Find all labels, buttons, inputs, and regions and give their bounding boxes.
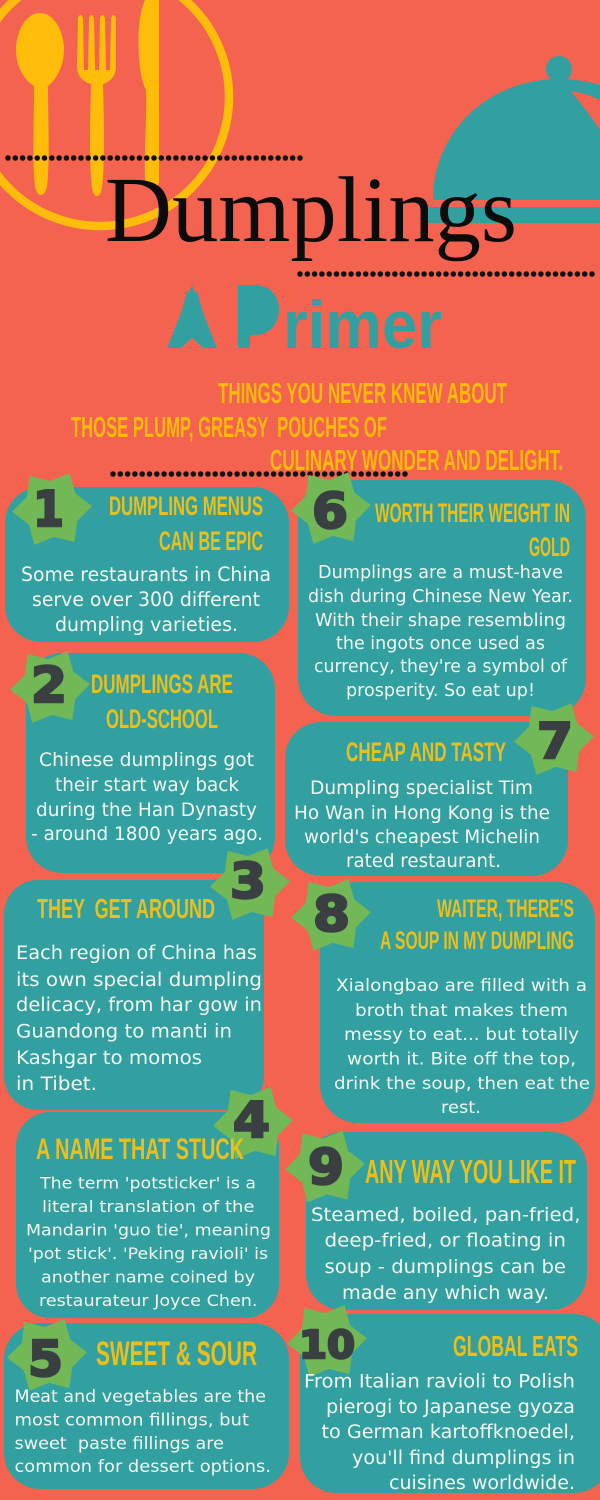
panel: fact 7 <box>285 702 596 876</box>
panel: fact 8 <box>289 878 595 1123</box>
subtitle: A Primer: rimer <box>283 287 442 363</box>
title: Dumplings <box>105 159 517 262</box>
body: fact 6: prosperity. So eat up! <box>346 681 535 701</box>
body: fact 9: soup - dumplings can be <box>324 1256 566 1278</box>
body: fact 1: dumpling varieties. <box>55 613 238 636</box>
body: fact 5: most common fillings, but <box>14 1411 250 1430</box>
intro text <box>71 378 563 477</box>
body: fact 8: drink the soup, then eat the <box>334 1074 590 1094</box>
heading: fact 2: DUMPLINGS ARE <box>91 669 233 699</box>
body: fact 4: Mandarin 'guo tie', meaning <box>26 1221 271 1240</box>
body: fact 1 <box>21 563 271 636</box>
icon: star badge 3 <box>208 847 292 921</box>
panel: fact 5 <box>4 1318 289 1489</box>
icon: star badge 1: 1 <box>33 481 64 538</box>
body: fact 6: dish during Chinese New Year. <box>308 587 573 607</box>
body: fact 6: Dumplings are a must-have <box>318 563 563 583</box>
body: fact 3: its own special dumpling <box>16 970 262 991</box>
body: fact 3: Each region of China has <box>16 943 257 964</box>
body: fact 8: worth it. Bite off the top, <box>347 1050 576 1070</box>
body: fact 8: Xialongbao are filled with a <box>336 976 587 996</box>
divider: top dotted line <box>8 155 302 161</box>
icon: star badge 10: 10 <box>299 1323 355 1367</box>
body: fact 4: The term 'potsticker' is a <box>39 1174 256 1193</box>
body: fact 2: during the Han Dynasty <box>36 799 257 821</box>
body: fact 5: sweet paste fillings are <box>14 1434 224 1453</box>
body: fact 5: Meat and vegetables are the <box>14 1387 266 1406</box>
icon: star badge 8: 8 <box>313 886 350 943</box>
body: fact 7: rated restaurant. <box>346 850 501 872</box>
body: fact 2: Chinese dumplings got <box>39 749 254 771</box>
icon: star badge 2: 2 <box>31 657 67 714</box>
icon: star badge 1 <box>10 472 94 546</box>
icon: star badge 9: 9 <box>308 1139 344 1196</box>
body: fact 7: world's cheapest Michelin <box>304 826 540 848</box>
body: fact 10 <box>304 1372 575 1494</box>
subtitle: A Primer <box>167 271 442 367</box>
body: fact 8: broth that makes them <box>355 1001 568 1021</box>
body: fact 10: From Italian ravioli to Polish <box>304 1372 575 1392</box>
body: fact 4: literal translation of the <box>42 1197 254 1216</box>
body: fact 9 <box>311 1204 580 1304</box>
icon: fork <box>77 15 116 196</box>
panel: fact 3 <box>4 847 292 1110</box>
body: fact 9: deep-fried, or floating in <box>324 1230 566 1252</box>
icon: star badge 8 <box>289 878 373 952</box>
body: fact 10: cuisines worldwide. <box>389 1473 575 1494</box>
heading: fact 5: SWEET & SOUR <box>96 1335 257 1373</box>
icon: star badge 6: 6 <box>312 483 348 540</box>
body: fact 9: made any which way. <box>342 1282 549 1304</box>
body: fact 10: to German kartoffknoedel, <box>322 1422 575 1443</box>
body: fact 4: 'pot stick'. 'Peking ravioli' is <box>28 1244 268 1263</box>
heading: fact 7: CHEAP AND TASTY <box>346 737 506 767</box>
body: fact 10: you'll find dumplings in <box>352 1448 575 1469</box>
body: fact 7 <box>294 777 550 872</box>
body: fact 2: - around 1800 years ago. <box>31 823 263 845</box>
body: fact 6: With their shape resembling <box>315 611 566 631</box>
icon: star badge 6 <box>289 471 373 545</box>
heading: fact 2: OLD-SCHOOL <box>106 704 218 734</box>
body: fact 6: the ingots once used as <box>336 634 545 654</box>
body: fact 7: Ho Wan in Hong Kong is the <box>294 802 550 824</box>
subtitle: A Primer: A <box>170 275 214 364</box>
icon: star badge 2 <box>8 650 92 724</box>
body: fact 5 <box>14 1387 271 1476</box>
icon: star badge 9 <box>283 1129 367 1204</box>
icon: spoon <box>16 13 64 195</box>
icon: star badge 10 <box>285 1304 369 1378</box>
heading: fact 2 <box>91 669 233 734</box>
body: fact 3: delicacy, from har gow in <box>16 995 262 1016</box>
icon: knife <box>138 0 159 189</box>
heading: fact 1 <box>109 491 263 556</box>
body: fact 9: Steamed, boiled, pan-fried, <box>311 1204 580 1226</box>
heading: fact 1: DUMPLING MENUS <box>109 491 263 521</box>
body: fact 3: Kashgar to momos <box>16 1048 202 1069</box>
subtitle: A Primer: P <box>234 271 280 367</box>
body: fact 7: Dumpling specialist Tim <box>310 777 533 799</box>
body: fact 3: in Tibet. <box>16 1074 97 1095</box>
panel: fact 9 <box>283 1129 587 1310</box>
panel: fact 4 <box>16 1086 295 1318</box>
body: fact 1: serve over 300 different <box>32 588 260 611</box>
body: fact 6: currency, they're a symbol of <box>314 657 568 677</box>
divider: dotted line under title <box>300 271 596 277</box>
heading: fact 1: CAN BE EPIC <box>159 526 263 556</box>
icon: serving cloche <box>425 56 600 223</box>
divider: dotted line above cards <box>113 471 408 477</box>
body: fact 1: Some restaurants in China <box>21 563 271 586</box>
icon: star badge 4 <box>211 1086 295 1160</box>
body: fact 2: their start way back <box>55 774 239 796</box>
body: fact 5: common for dessert options. <box>14 1457 271 1476</box>
icon: star badge 5 <box>5 1318 89 1392</box>
body: fact 3: Guandong to manti in <box>16 1022 232 1042</box>
icon: star badge 7: 7 <box>537 713 573 770</box>
icon: star badge 4: 4 <box>233 1092 270 1149</box>
body: fact 4: restaurateur Joyce Chen. <box>39 1291 258 1310</box>
heading: fact 8 <box>380 895 574 955</box>
body: fact 4: another name coined by <box>41 1268 255 1287</box>
panel: fact 10 <box>285 1304 600 1494</box>
body: fact 8: rest. <box>441 1098 481 1118</box>
heading: fact 3: THEY GET AROUND <box>37 893 215 924</box>
panel: fact 1 <box>5 472 289 642</box>
heading: fact 4: A NAME THAT STUCK <box>36 1133 244 1166</box>
body: fact 8 <box>334 976 590 1118</box>
panel: fact 6 <box>289 471 586 716</box>
body: fact 3 <box>16 943 262 1095</box>
icon: star badge 7 <box>512 702 596 776</box>
body: fact 2 <box>31 749 263 845</box>
body: fact 8: messy to eat... but totally <box>344 1025 579 1045</box>
icon: plate ring <box>0 0 229 226</box>
icon: star badge 3: 3 <box>230 853 266 910</box>
panel: fact 2 <box>8 650 275 873</box>
body: fact 6 <box>308 563 573 701</box>
icon: star badge 5: 5 <box>28 1331 63 1388</box>
body: fact 4 <box>26 1174 271 1310</box>
heading: fact 6 <box>375 498 570 562</box>
body: fact 10: pierogi to Japanese gyoza <box>326 1397 575 1418</box>
